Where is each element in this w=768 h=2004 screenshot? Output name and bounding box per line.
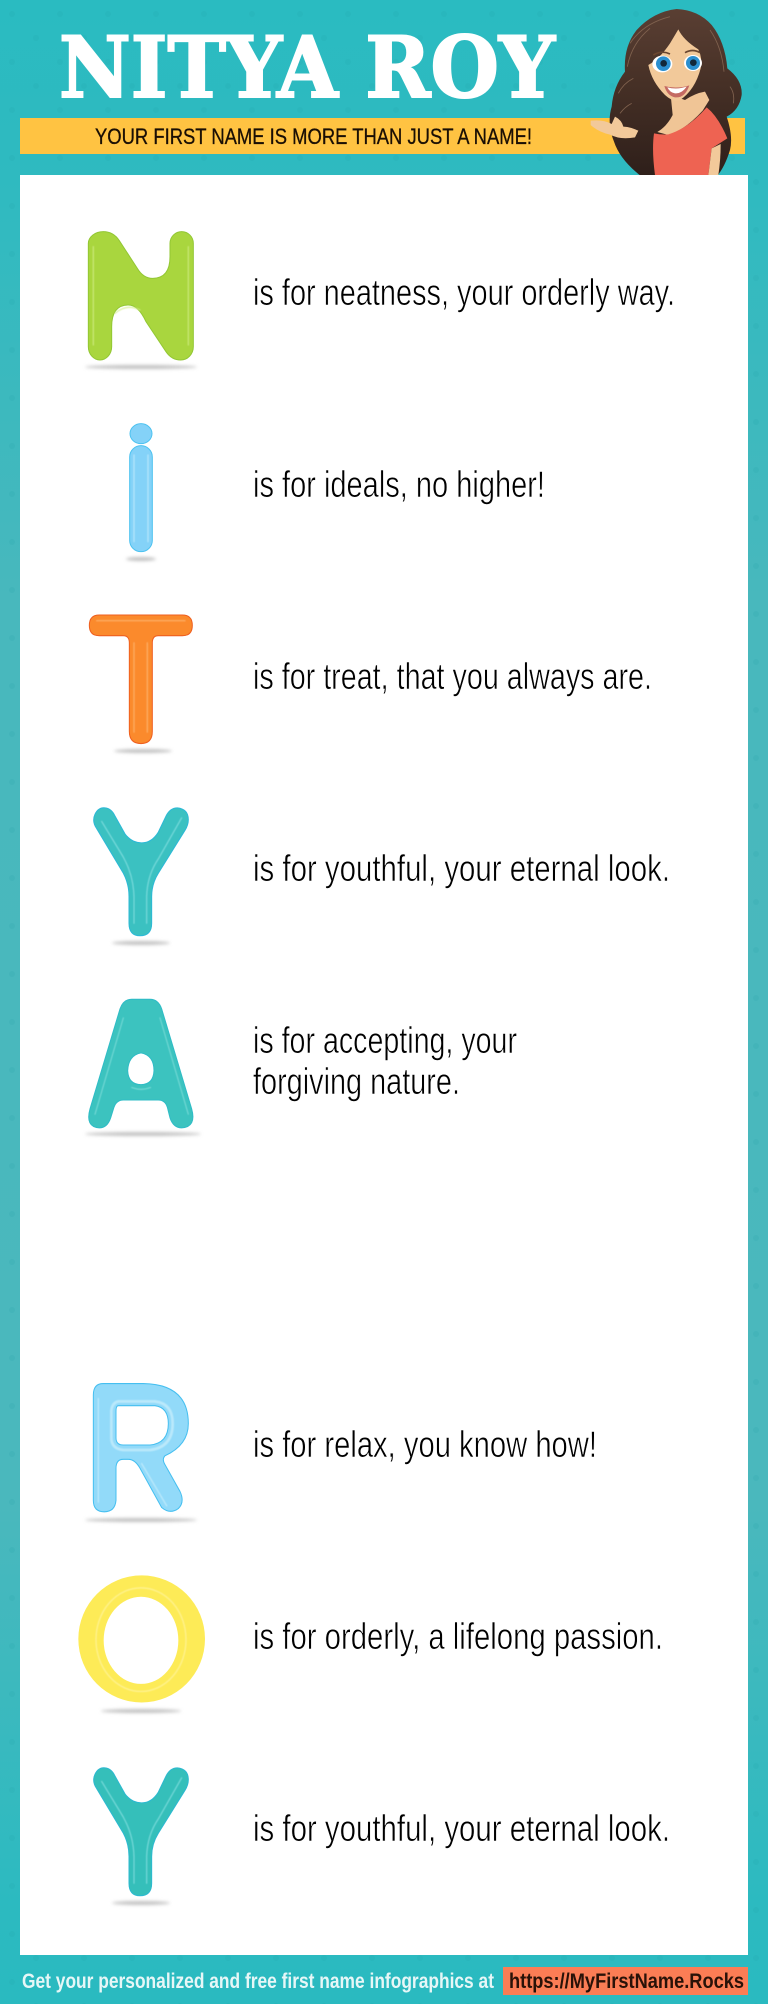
shadow xyxy=(85,1518,197,1522)
title: NITYA ROY xyxy=(59,18,556,117)
text: R line: is for relax, you know how! xyxy=(253,1424,597,1465)
row: R xyxy=(85,1384,197,1522)
text: A lines: is for accepting, your xyxy=(253,1020,517,1061)
content panel xyxy=(20,175,748,955)
shadow xyxy=(85,365,197,369)
row: T xyxy=(89,615,192,753)
icon: letter R xyxy=(93,1384,188,1512)
text: I line: is for ideals, no higher! xyxy=(253,464,545,505)
shadow xyxy=(85,1132,201,1136)
row: Y xyxy=(94,808,188,945)
text: T line: is for treat, that you always are. xyxy=(253,656,652,697)
shadow xyxy=(112,1901,170,1905)
icon: letter Y xyxy=(94,808,188,936)
shadow xyxy=(101,1709,181,1713)
footer text: Get your personalized and free first name infographics at xyxy=(22,1970,494,1993)
icon: letter N xyxy=(88,232,193,360)
row: I xyxy=(126,424,156,561)
icon: letter i xyxy=(130,424,152,552)
row: O xyxy=(78,1575,205,1713)
icon: letter A xyxy=(89,999,193,1128)
text: A lines: forgiving nature. xyxy=(253,1061,460,1102)
icon: letter O xyxy=(78,1575,205,1702)
text: O line: is for orderly, a lifelong passion. xyxy=(253,1616,663,1657)
icon: letter T xyxy=(89,615,192,744)
row: N xyxy=(85,232,197,369)
row: Y second xyxy=(94,1768,188,1905)
shadow xyxy=(114,749,172,753)
tagline banner: YOUR FIRST NAME IS MORE THAN JUST A NAME! xyxy=(95,124,532,149)
tagline banner xyxy=(20,118,745,154)
shadow xyxy=(126,557,156,561)
text: Y second line: is for youthful, your eternal look. xyxy=(253,1808,670,1849)
icon: letter Y second xyxy=(94,1768,188,1896)
illustration: cartoon woman xyxy=(591,9,742,177)
row: A xyxy=(85,999,201,1136)
shadow xyxy=(112,941,170,945)
text: Y line: is for youthful, your eternal look. xyxy=(253,848,670,889)
content panel lower xyxy=(20,955,748,1955)
